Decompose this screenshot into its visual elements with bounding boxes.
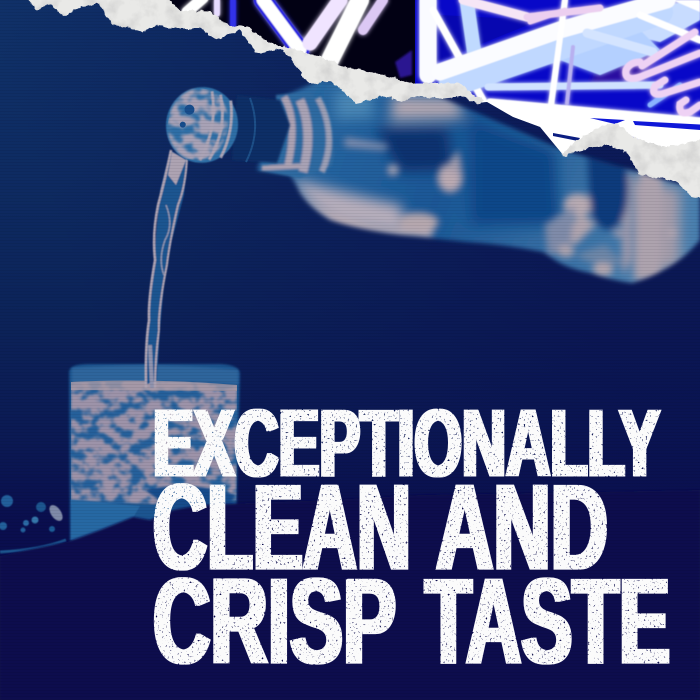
neon: bright white lower area [488,104,700,158]
bokeh droplets on the table [0,495,66,552]
torn paper strip: right [563,125,700,196]
water stream [145,150,188,388]
glass of water [69,364,240,542]
bottle body [256,81,700,286]
photo panel: dark blue background with bottle and glass [0,0,700,554]
headline line 3: CRISP [153,553,396,689]
background: neon light photo [150,0,700,200]
bottle shoulder ridges [258,92,334,178]
bottle [165,81,700,286]
headline line 2: CLEAN [153,459,411,595]
bottle neck [232,95,290,163]
dark table mound [10,490,688,554]
torn paper strip: upper left [30,0,482,103]
photo scanline texture [0,84,699,538]
headline line 2: AND [436,459,608,595]
bottle cap [165,86,238,164]
neon tubes: right cluster [428,0,700,122]
neon tubes: left cluster [187,0,383,60]
headline [153,390,670,689]
neon script: pink hooks [626,32,700,113]
